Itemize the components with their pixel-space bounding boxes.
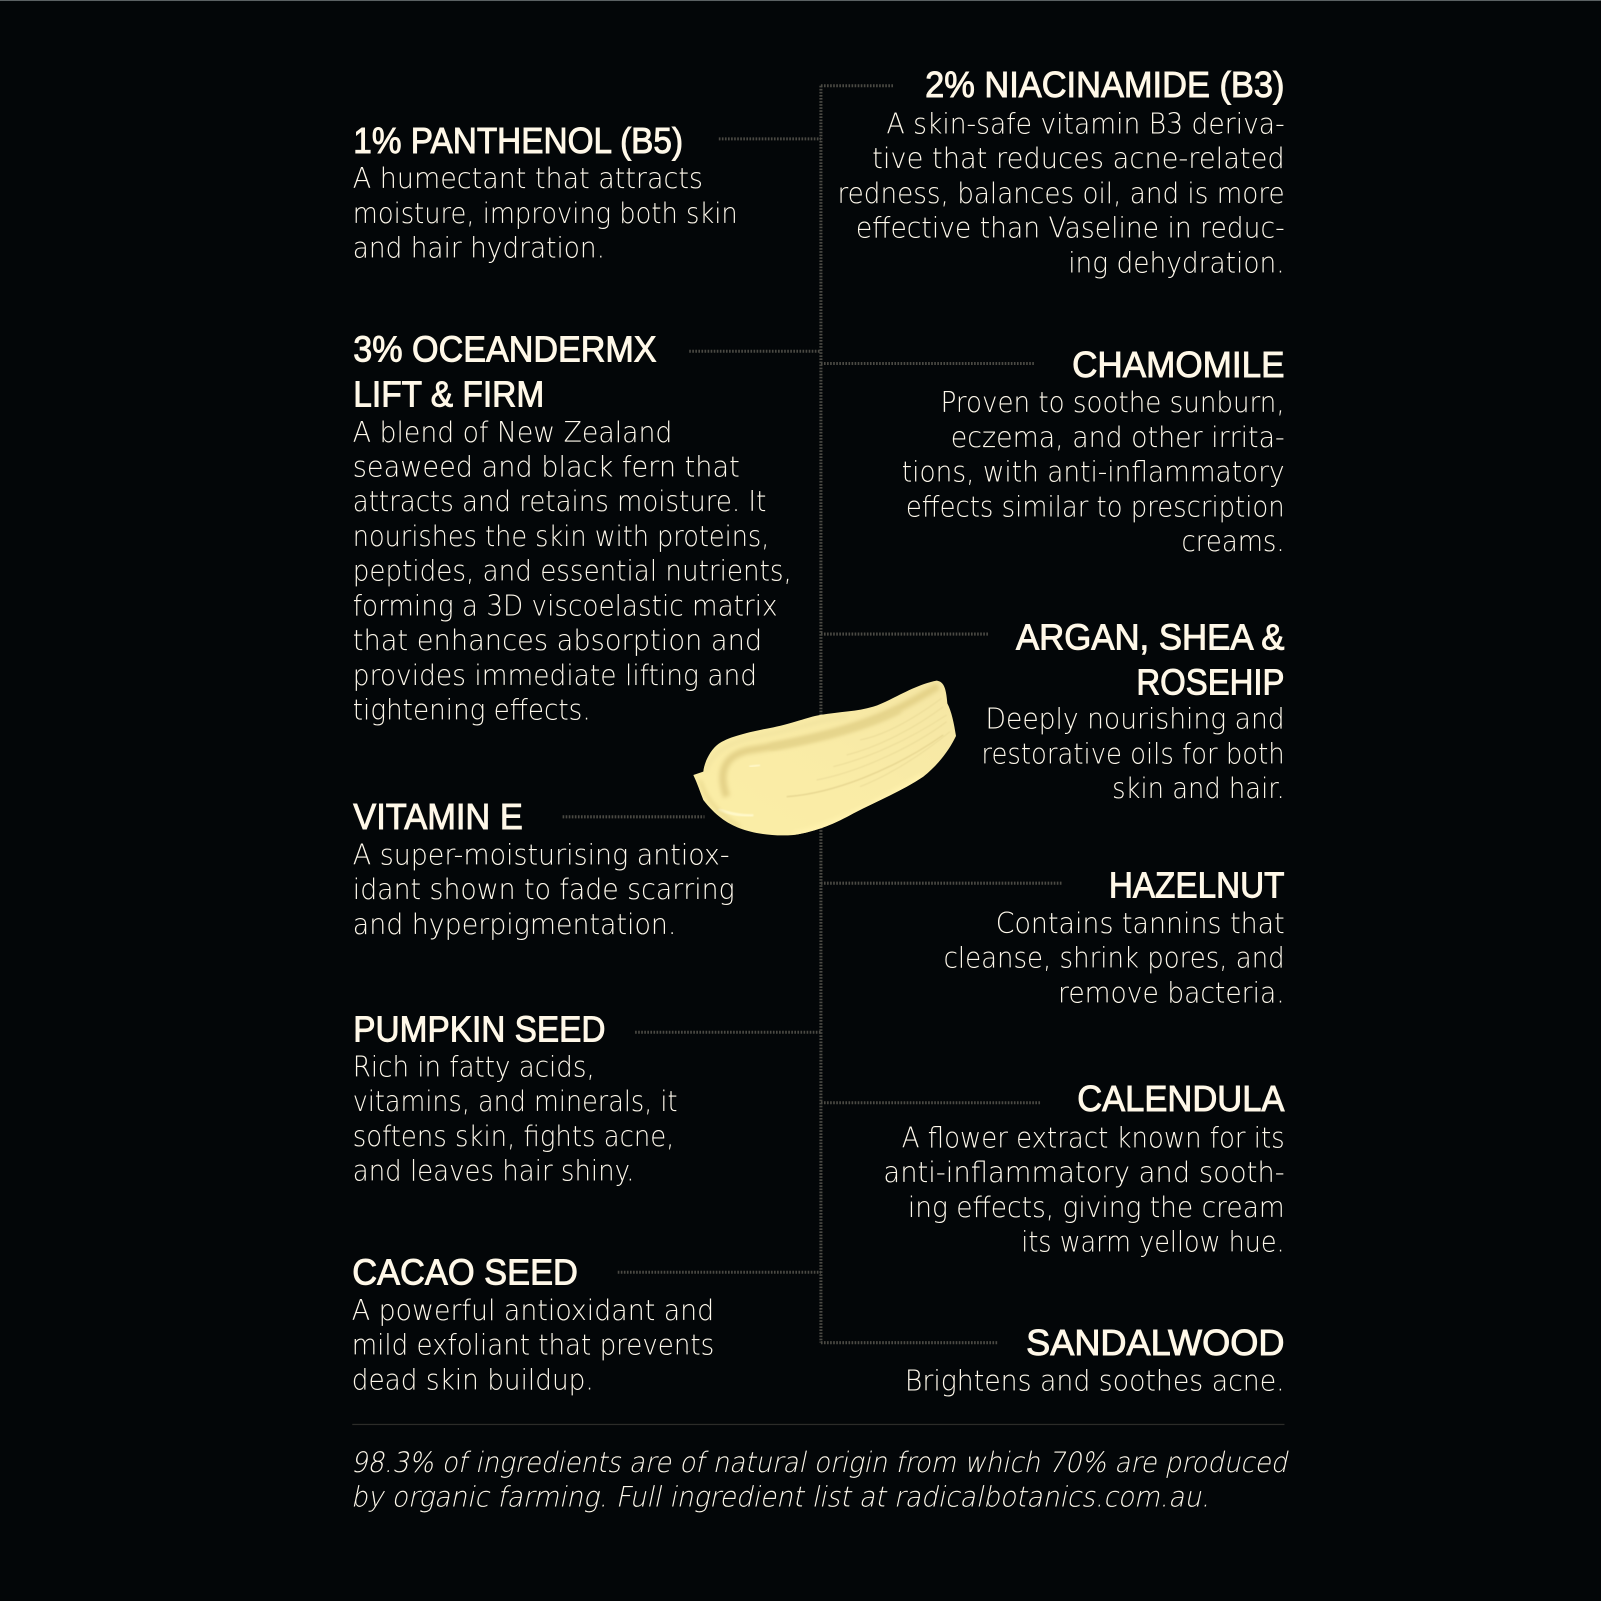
panel: panthenol: [353, 121, 738, 265]
heading: LIFT & FIRM: [353, 374, 544, 414]
description: [353, 416, 792, 727]
heading: CALENDULA: [1077, 1079, 1285, 1119]
description: Rich in fatty acids,: [353, 1050, 595, 1083]
description: its warm yellow hue.: [1021, 1225, 1285, 1258]
description: nourishes the skin with proteins,: [353, 520, 769, 553]
description: creams.: [1182, 525, 1285, 558]
description: forming a 3D viscoelastic matrix: [353, 589, 778, 622]
heading: PUMPKIN SEED: [353, 1009, 605, 1049]
heading: ROSEHIP: [1136, 662, 1284, 702]
cream swatch: [693, 681, 956, 835]
description: peptides, and essential nutrients,: [353, 555, 792, 588]
description: [353, 162, 738, 265]
description: [944, 907, 1285, 1009]
heading: 3% OCEANDERMX: [353, 329, 657, 369]
heading: 1% PANTHENOL (B5): [353, 121, 683, 161]
footer note: by organic farming. Full ingredient list at radicalbotanics.com.au.: [349, 1481, 1215, 1514]
description: [353, 839, 735, 941]
description: and hair hydration.: [353, 232, 605, 265]
description: A super-moisturising antiox-: [353, 839, 730, 872]
description: tightening effects.: [353, 694, 591, 727]
description: remove bacteria.: [1058, 976, 1285, 1009]
description: [981, 703, 1285, 805]
description: dead skin buildup.: [352, 1363, 594, 1396]
top edge line: [0, 0, 1601, 1]
panel: pumpkin seed: [353, 1009, 677, 1188]
description: cleanse, shrink pores, and: [944, 942, 1285, 975]
description: vitamins, and minerals, it: [353, 1085, 677, 1118]
description: A flower extract known for its: [902, 1121, 1285, 1154]
description: that enhances absorption and: [353, 624, 762, 657]
connector lines: [563, 86, 1062, 1343]
panel: sandalwood: [905, 1323, 1285, 1397]
description: tions, with anti-inflammatory: [902, 456, 1285, 489]
description: redness, balances oil, and is more: [837, 177, 1285, 210]
description: moisture, improving both skin: [353, 197, 738, 230]
description: [352, 1294, 714, 1396]
description: restorative oils for both: [981, 737, 1285, 770]
panel: chamomile: [902, 345, 1285, 558]
description: effective than Vaseline in reduc-: [856, 212, 1285, 245]
panel: niacinamide: [837, 65, 1285, 279]
description: mild exfoliant that prevents: [352, 1329, 714, 1362]
description: A powerful antioxidant and: [352, 1294, 714, 1327]
panel: oceandermx: [353, 329, 792, 727]
heading: [1016, 617, 1285, 702]
description: softens skin, fights acne,: [353, 1120, 674, 1153]
description: and hyperpigmentation.: [353, 908, 676, 941]
description: A humectant that attracts: [353, 162, 703, 195]
description: Contains tannins that: [996, 907, 1285, 940]
description: eczema, and other irrita-: [951, 421, 1285, 454]
description: skin and hair.: [1112, 772, 1285, 805]
description: A skin-safe vitamin B3 deriva-: [886, 107, 1285, 140]
panel: argan shea rosehip: [981, 617, 1285, 805]
description: Brightens and soothes acne.: [905, 1364, 1285, 1397]
description: seaweed and black fern that: [353, 451, 740, 484]
heading: HAZELNUT: [1109, 865, 1284, 905]
heading: CACAO SEED: [352, 1252, 578, 1292]
description: attracts and retains moisture. It: [353, 485, 766, 518]
description: Deeply nourishing and: [986, 703, 1285, 736]
description: [353, 1050, 677, 1188]
footer note: 98.3% of ingredients are of natural origin from which 70% are produced: [349, 1446, 1292, 1479]
heading: VITAMIN E: [353, 797, 523, 837]
description: [902, 386, 1285, 558]
panel: cacao seed: [352, 1252, 714, 1396]
description: idant shown to fade scarring: [353, 873, 735, 906]
panel: vitamin e: [353, 797, 735, 941]
description: [883, 1121, 1285, 1258]
description: effects similar to prescription: [906, 490, 1285, 523]
description: Proven to soothe sunburn,: [941, 386, 1285, 419]
description: and leaves hair shiny.: [353, 1155, 635, 1188]
heading: CHAMOMILE: [1072, 345, 1284, 385]
description: ing dehydration.: [1068, 246, 1285, 279]
heading: SANDALWOOD: [1026, 1323, 1284, 1363]
heading: [353, 329, 657, 414]
footer note: [349, 1446, 1292, 1514]
panel: calendula: [883, 1079, 1285, 1258]
description: anti-inflammatory and sooth-: [883, 1156, 1285, 1189]
description: A blend of New Zealand: [353, 416, 672, 449]
footer divider: [352, 1424, 1284, 1425]
description: tive that reduces acne-related: [872, 142, 1285, 175]
description: [837, 107, 1285, 279]
description: ing effects, giving the cream: [908, 1191, 1285, 1224]
heading: 2% NIACINAMIDE (B3): [925, 65, 1284, 105]
description: provides immediate lifting and: [353, 659, 757, 692]
heading: ARGAN, SHEA &: [1016, 617, 1285, 657]
panel: hazelnut: [944, 865, 1285, 1009]
